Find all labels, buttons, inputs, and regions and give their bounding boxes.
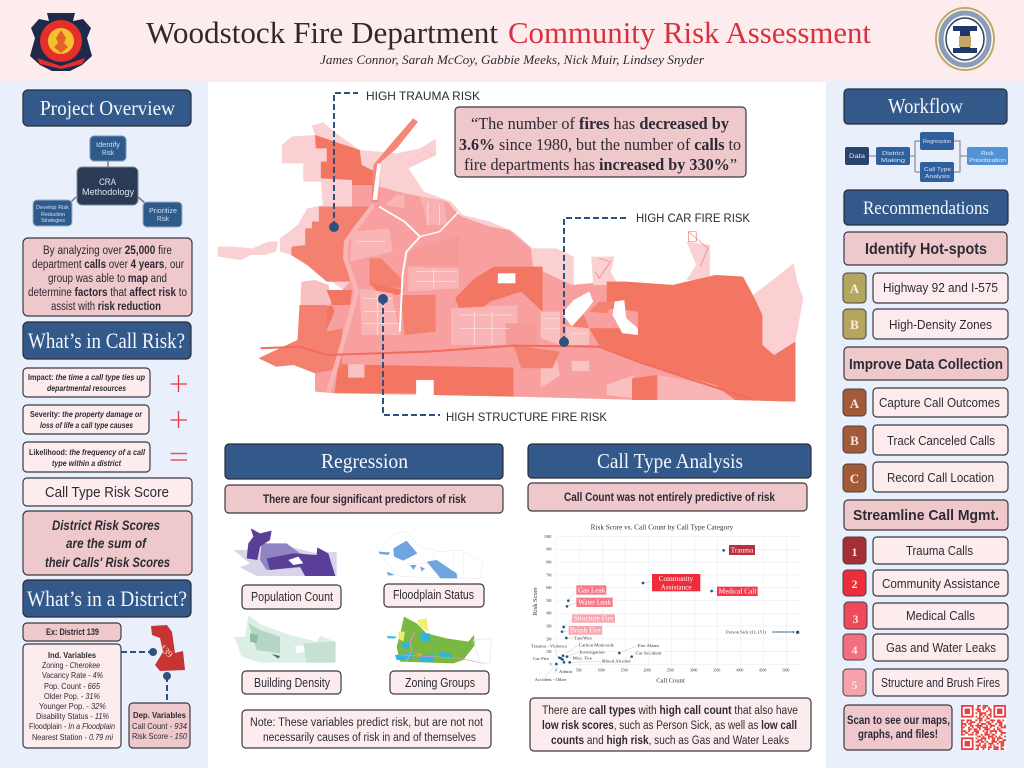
item: structure and brush fires: Structure and Brush Fires — [881, 676, 1000, 690]
callout: impact: Impact: the time a call type ties up — [28, 372, 145, 382]
text block: variables note — [242, 710, 491, 748]
chart: risk score vs call count scatter: Fire Alarm — [638, 643, 660, 648]
item: capture call outcomes — [843, 388, 1008, 417]
item: gas and water leaks: Gas and Water Leaks — [886, 641, 996, 655]
label: building density — [242, 671, 341, 694]
text block: call count takeaway: counts and high risk, such as Gas and Water Leaks — [551, 735, 789, 747]
chart: risk score vs call count scatter: Gas Leak — [578, 586, 606, 594]
chart: risk score vs call count scatter: Assistance — [661, 583, 692, 591]
diagram: CRA methodology: Methodology — [82, 187, 134, 197]
callout: severity: Severity: the property damage or — [30, 409, 143, 419]
list: independent variables: Pop. Count - 665 — [44, 681, 100, 691]
item: community assistance: Community Assistance — [882, 577, 1000, 591]
chart: risk score vs call count scatter: Carbon Monoxide — [579, 642, 614, 647]
header: title and authors — [30, 8, 994, 71]
callout: scan prompt — [844, 705, 952, 750]
chart: risk score vs call count scatter: 500 — [576, 668, 582, 672]
chart: risk score vs call count scatter — [531, 524, 800, 684]
item: trauma calls — [843, 537, 1008, 564]
item: community assistance — [843, 570, 1008, 596]
subheading: streamline call management: Streamline Call Mgmt. — [853, 507, 999, 524]
chart: risk score vs call count scatter: 0 — [555, 668, 557, 672]
heading: recommendations — [844, 190, 1008, 225]
list: dependent variables: Dep. Variables — [133, 710, 186, 720]
heading: workflow — [844, 89, 1007, 124]
list: independent variables: Disability Status - 11% — [36, 711, 109, 721]
item: record call location: Record Call Location — [887, 471, 994, 485]
diagram: CRA methodology: Risk — [102, 150, 114, 157]
text block: predictors note: There are four significant predictors of risk — [263, 494, 467, 506]
item: gas and water leaks: 4 — [852, 643, 858, 657]
panel: what's in call risk — [23, 322, 192, 575]
text block: overview summary: group was able to map and — [48, 273, 167, 285]
icon: equals — [170, 454, 187, 460]
chart: risk score vs call count scatter: 900 — [546, 548, 552, 552]
panel: project overview — [23, 90, 192, 316]
subheading: improve data collection — [844, 347, 1008, 380]
chart: risk score vs call count scatter: 3000 — [690, 668, 697, 672]
item: capture call outcomes: Capture Call Outcomes — [879, 396, 1000, 410]
map: zoning groups — [387, 617, 492, 663]
list: independent variables — [23, 644, 121, 748]
text block: predictors note — [225, 485, 503, 513]
label: population count: Population Count — [251, 590, 333, 604]
chart: risk score vs call count scatter: 5000 — [782, 668, 789, 672]
chart: risk score vs call count scatter: 400 — [546, 612, 552, 616]
diagram: workflow steps: Making — [881, 158, 905, 164]
label: floodplain status: Floodplain Status — [393, 588, 474, 602]
chart: risk score vs call count scatter: Investigation — [580, 650, 606, 655]
item: record call location — [843, 462, 1008, 492]
icon: QR code — [961, 705, 1006, 750]
callout: impact: departmental resources — [47, 383, 126, 393]
text block: call count note: Call Count was not entirely predictive of risk — [564, 492, 776, 504]
chart: risk score vs call count scatter: 2000 — [644, 668, 651, 672]
heading: workflow: Workflow — [888, 94, 964, 118]
heading: call type analysis — [528, 444, 811, 478]
text block: district risk scores — [23, 511, 192, 575]
item: structure and brush fires: 5 — [852, 678, 858, 692]
chart: risk score vs call count scatter: Trauma - Violence — [531, 643, 567, 648]
text block: call count takeaway — [530, 698, 811, 751]
chart: risk score vs call count scatter: Structure Fire — [574, 615, 613, 623]
subheading: streamline call management — [844, 500, 1008, 530]
map: community risk choropleth — [218, 118, 803, 402]
list: independent variables: Ind. Variables — [48, 650, 96, 660]
result: call type risk score — [23, 478, 192, 506]
chart: risk score vs call count scatter: Car Accident — [636, 650, 662, 655]
item: highway 92 and I-575 — [843, 273, 1008, 303]
item: high-density zones — [843, 309, 1008, 339]
callout: likelihood: Likelihood: the frequency of a call — [29, 447, 146, 457]
list: dependent variables: Risk Score - 150 — [132, 731, 187, 741]
chart: risk score vs call count scatter: 100 — [546, 650, 552, 654]
chart: risk score vs call count scatter: 1500 — [621, 668, 628, 672]
chart: risk score vs call count scatter: Brush Fire — [570, 626, 601, 634]
panel: recommendations — [843, 190, 1008, 750]
diagram: CRA methodology: Prioritize — [149, 208, 177, 215]
chart: risk score vs call count scatter: 300 — [546, 624, 552, 628]
callout: high trauma risk: HIGH TRAUMA RISK — [366, 89, 480, 103]
callout: high structure fire risk: HIGH STRUCTURE FIRE RISK — [446, 410, 607, 424]
heading: what's in a district — [23, 580, 191, 617]
text block: overview summary: determine factors that affect risk to — [28, 287, 187, 299]
chart: risk score vs call count scatter: 800 — [546, 561, 552, 565]
diagram: CRA methodology: Identify — [96, 142, 121, 149]
list: independent variables: Nearest Station - 0.79 mi — [32, 732, 114, 742]
item: track canceled calls — [843, 425, 1008, 455]
map: building density — [234, 615, 336, 663]
diagram: CRA methodology: Risk — [157, 216, 169, 223]
title: Woodstock Fire Department — [146, 15, 498, 50]
quote: fires vs calls — [455, 107, 746, 177]
panel: call type analysis — [528, 444, 811, 751]
item: capture call outcomes: A — [850, 396, 860, 411]
heading: what's in call risk: What’s in Call Risk? — [28, 328, 185, 353]
item: structure and brush fires — [843, 669, 1008, 696]
chart: risk score vs call count scatter: 500 — [546, 599, 552, 603]
text block: district risk scores: District Risk Scores — [52, 517, 160, 533]
text block: variables note: Note: These variables predict risk, but are not not — [250, 717, 484, 729]
quote: fires vs calls: fire departments has increased by 330%” — [464, 155, 737, 174]
callout: scan prompt: Scan to see our maps, — [847, 715, 950, 727]
diagram: workflow steps: District — [882, 151, 904, 157]
callout: high trauma risk — [329, 89, 480, 232]
result: call type risk score: Call Type Risk Score — [45, 484, 169, 501]
subheading: identify hot-spots: Identify Hot-spots — [865, 241, 987, 258]
item: track canceled calls: B — [850, 433, 859, 448]
item: highway 92 and I-575: A — [850, 281, 860, 296]
callout: severity: loss of life a call type causes — [40, 420, 133, 430]
icon: plus — [170, 375, 187, 392]
icon: district 139 map: 139 — [157, 643, 174, 660]
label: population count — [242, 585, 341, 609]
panel: workflow — [844, 89, 1008, 182]
authors: James Connor, Sarah McCoy, Gabbie Meeks, Nick Muir, Lindsey Snyder — [320, 52, 705, 67]
heading: regression — [225, 444, 503, 479]
callout: impact — [23, 368, 150, 397]
text block: overview summary — [23, 238, 192, 316]
map: population count — [233, 528, 337, 576]
list: independent variables: Older Pop. - 31% — [44, 691, 100, 701]
chart: risk score vs call count scatter: 2500 — [667, 668, 674, 672]
item: highway 92 and I-575: Highway 92 and I-575 — [883, 281, 998, 295]
heading: call type analysis: Call Type Analysis — [597, 449, 743, 473]
chart: risk score vs call count scatter: Misc. Fire — [573, 655, 592, 660]
chart: risk score vs call count scatter: 200 — [546, 637, 552, 641]
quote: fires vs calls: “The number of fires has decreased by — [471, 114, 729, 133]
chart: risk score vs call count scatter: Car Fire — [533, 656, 549, 661]
list: dependent variables — [129, 703, 190, 748]
chart: risk score vs call count scatter: 600 — [546, 586, 552, 590]
item: community assistance: 2 — [852, 577, 858, 591]
panel: regression — [225, 444, 503, 748]
chart: risk score vs call count scatter: Medical Call — [719, 588, 756, 596]
text block: variables note: necessarily causes of risk in and of themselves — [263, 732, 476, 744]
item: medical calls — [844, 602, 1008, 629]
chart: risk score vs call count scatter: 1000 — [598, 668, 605, 672]
text block: district risk scores: their Calls' Risk Scores — [45, 554, 170, 570]
icon: district 139 map — [151, 625, 185, 671]
chart: risk score vs call count scatter: 4000 — [736, 668, 743, 672]
text block: district risk scores: are the sum of — [66, 535, 147, 551]
item: high-density zones: B — [850, 317, 859, 332]
map: floodplain status — [378, 532, 483, 578]
callout: scan prompt: graphs, and files! — [858, 729, 938, 741]
list: independent variables: Floodplain - In a Floodplain — [29, 721, 115, 731]
diagram: CRA methodology: CRA — [99, 177, 116, 187]
diagram: workflow steps: Analysis — [925, 174, 950, 180]
chart: risk score vs call count scatter: Blood Alcohol — [602, 659, 632, 664]
chart: risk score vs call count scatter: Community — [659, 575, 694, 583]
icon: plus — [170, 411, 187, 428]
label: example district — [23, 623, 121, 641]
label: zoning groups — [390, 671, 489, 694]
heading: recommendations: Recommendations — [863, 198, 989, 219]
callout: severity — [23, 405, 149, 434]
item: gas and water leaks — [843, 634, 1008, 661]
connector: district to independent variables — [121, 648, 157, 656]
callout: high car fire risk: HIGH CAR FIRE RISK — [636, 211, 750, 225]
chart: risk score vs call count scatter: Admin — [559, 669, 573, 674]
label: building density: Building Density — [254, 676, 331, 690]
chart: risk score vs call count scatter: Call Count — [656, 677, 685, 684]
item: medical calls: 3 — [852, 612, 858, 626]
chart: risk score vs call count scatter: 700 — [546, 573, 552, 577]
diagram: workflow steps: Call Type — [924, 167, 951, 173]
list: independent variables: Zoning - Cherokee — [42, 660, 100, 670]
item: trauma calls: 1 — [852, 545, 858, 559]
list: dependent variables: Call Count - 934 — [132, 721, 187, 731]
diagram: workflow steps — [845, 132, 1008, 182]
subheading: identify hot-spots — [844, 232, 1007, 265]
heading: what's in a district: What’s in a District? — [27, 586, 187, 611]
diagram: workflow steps: Regression — [923, 139, 951, 145]
item: trauma calls: Trauma Calls — [906, 544, 973, 558]
item: track canceled calls: Track Canceled Calls — [887, 434, 995, 448]
diagram: workflow steps: Prioritization — [969, 158, 1006, 164]
chart: risk score vs call count scatter: Trauma — [731, 547, 753, 555]
chart: risk score vs call count scatter: Person Sick (11,151) — [726, 630, 767, 636]
callout: high structure fire risk — [378, 294, 607, 424]
title accent: Community Risk Assessment — [508, 15, 871, 50]
diagram: CRA methodology: Develop Risk — [36, 205, 70, 211]
item: record call location: C — [850, 471, 859, 486]
chart: risk score vs call count scatter: Accident - Other — [535, 677, 567, 682]
icon: fire department logo — [30, 13, 92, 71]
text block: overview summary: assist with risk reduction — [51, 301, 161, 313]
text block: overview summary: By analyzing over 25,000 fire — [43, 245, 172, 257]
chart: risk score vs call count scatter: 4500 — [759, 668, 766, 672]
text block: overview summary: department calls over 4 years, our — [32, 259, 184, 271]
label: floodplain status — [384, 584, 484, 607]
text block: call count takeaway: low risk scores, such as Person Sick, as well as low call — [542, 720, 797, 732]
diagram: CRA methodology: Reduction — [41, 212, 65, 218]
heading: project overview — [23, 90, 191, 126]
item: medical calls: Medical Calls — [906, 609, 975, 623]
text block: call count note — [528, 483, 807, 511]
quote: fires vs calls: 3.6% since 1980, but the number of calls to — [459, 135, 741, 154]
heading: project overview: Project Overview — [40, 96, 176, 120]
callout: likelihood — [23, 442, 150, 472]
chart: risk score vs call count scatter: Water Leak — [578, 599, 611, 607]
diagram: workflow steps: Data — [849, 153, 865, 160]
label: zoning groups: Zoning Groups — [405, 676, 475, 690]
text block: call count takeaway: There are call types with high call count that also have — [542, 705, 798, 717]
diagram: CRA methodology — [33, 136, 182, 227]
list: independent variables: Younger Pop. - 32% — [39, 701, 106, 711]
chart: risk score vs call count scatter: Risk Score — [532, 587, 539, 615]
diagram: workflow steps: Risk — [981, 151, 994, 157]
item: high-density zones: High-Density Zones — [889, 318, 992, 332]
callout: likelihood: type within a district — [52, 458, 122, 468]
chart: risk score vs call count scatter: Risk Score vs. Call Count by Call Type Category — [591, 524, 734, 532]
subheading: improve data collection: Improve Data Collection — [849, 356, 1003, 373]
heading: regression: Regression — [321, 449, 408, 473]
chart: risk score vs call count scatter: 1000 — [544, 535, 551, 539]
chart: risk score vs call count scatter: Tree/Wire — [574, 635, 592, 640]
list: independent variables: Vacancy Rate - 4% — [42, 670, 103, 680]
label: example district: Ex: District 139 — [46, 627, 99, 637]
icon: university seal — [936, 8, 994, 70]
chart: risk score vs call count scatter: 3500 — [713, 668, 720, 672]
connector: district to dependent variables — [163, 672, 171, 702]
diagram: CRA methodology: Strategies — [41, 218, 66, 224]
panel: what's in a district — [23, 580, 191, 748]
heading: what's in call risk — [23, 322, 191, 359]
chart: risk score vs call count scatter: 0 — [550, 663, 552, 667]
callout: high car fire risk — [559, 211, 750, 347]
